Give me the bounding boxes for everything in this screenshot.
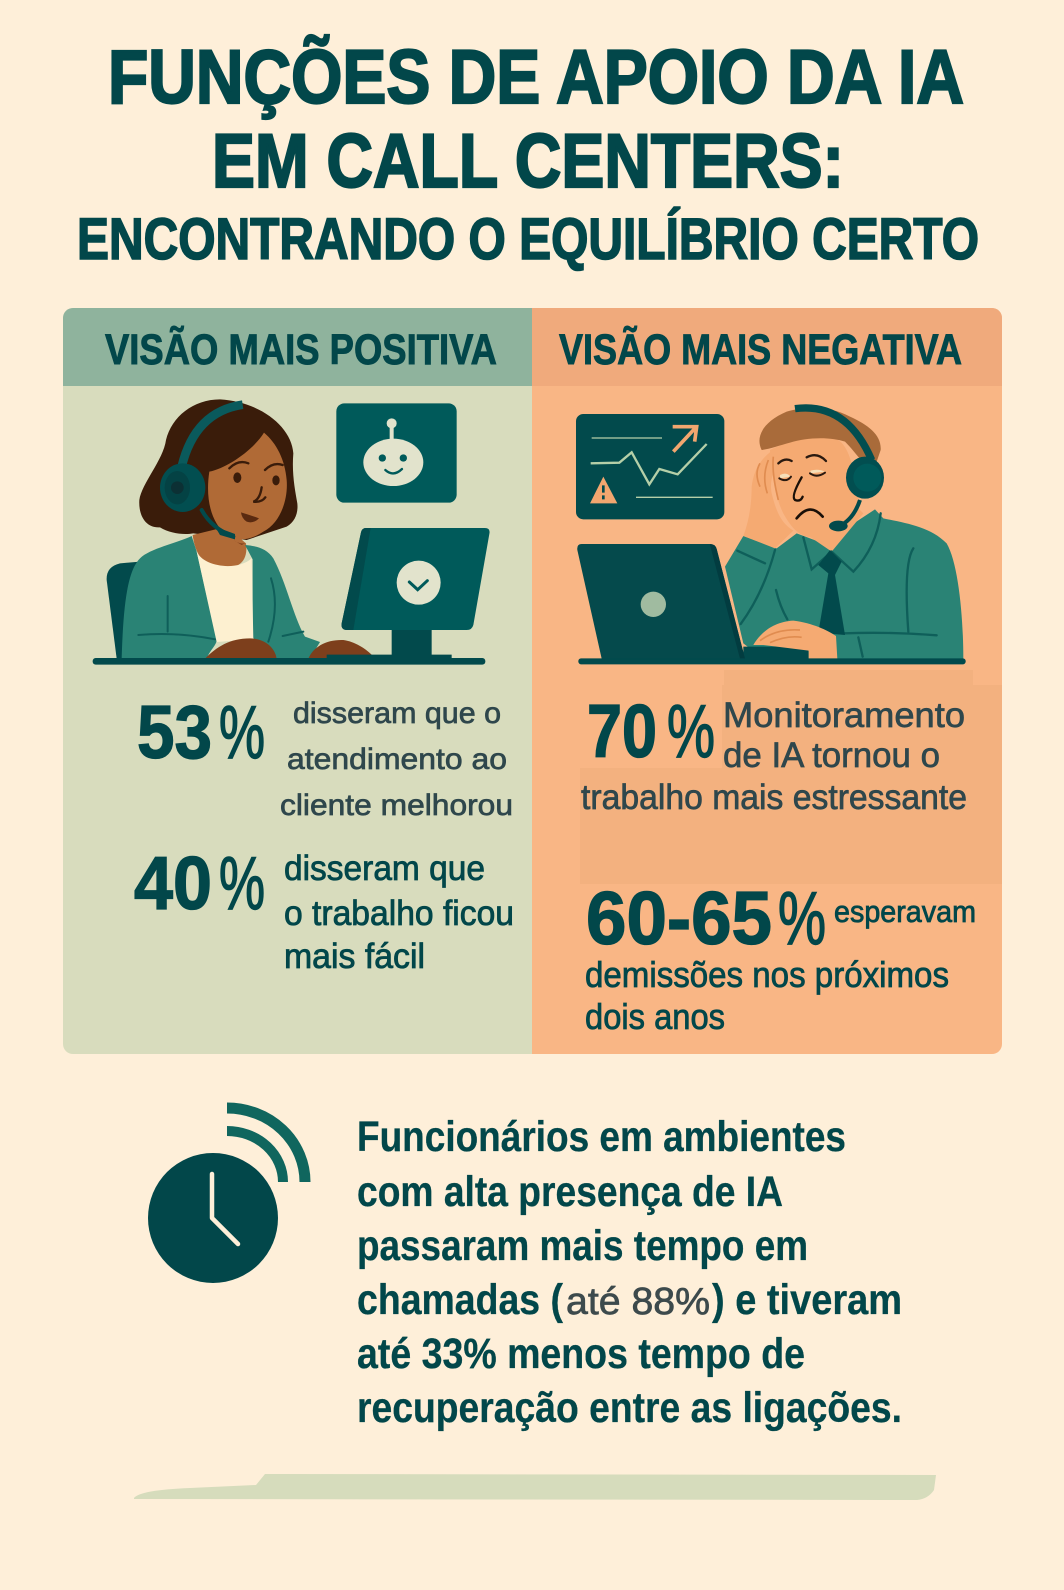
icon: robot — [336, 403, 457, 503]
footer bar — [134, 1474, 936, 1500]
stat: 70%: de IA tornou o — [723, 736, 940, 775]
collar and seams — [737, 513, 937, 657]
illustration: stressed agent with laptop and chart — [576, 408, 966, 664]
text block: summary: com alta presença de IA — [357, 1168, 783, 1216]
torso — [725, 509, 963, 659]
desk — [578, 658, 966, 664]
stat: 60-65%: esperavam — [834, 894, 976, 929]
stat: 40%: disseram que — [284, 849, 485, 888]
text block: summary: passaram mais tempo em — [357, 1222, 808, 1270]
hair — [139, 399, 298, 540]
icon: monitor with check — [327, 528, 490, 659]
stat: 60-65%: dois anos — [585, 996, 725, 1037]
stat: 60-65%: 60-65 — [586, 876, 772, 960]
jacket seams — [138, 578, 303, 642]
panel: visão mais negativa — [532, 308, 1002, 1054]
text block: summary: até 88% — [566, 1281, 710, 1323]
heading: visão mais negativa: VISÃO MAIS NEGATIVA — [559, 326, 962, 374]
text block: summary — [357, 1113, 902, 1432]
stat: 53%: cliente melhorou — [280, 789, 513, 822]
stat: 60-65%: demissões nos próximos — [585, 954, 949, 995]
icon: clock with signal arcs — [148, 1108, 305, 1283]
stat: 40% — [134, 841, 514, 976]
hands — [205, 638, 372, 659]
panel: visão mais positiva — [63, 308, 532, 1054]
text block: summary: até 33% menos tempo de — [357, 1330, 805, 1378]
stat: 53%: disseram que o — [293, 697, 501, 730]
stat: 40%: 40 — [134, 841, 212, 925]
headset — [795, 408, 884, 531]
desk — [93, 658, 485, 665]
stat: 53%: % — [219, 690, 265, 774]
face — [208, 433, 287, 539]
heading: visão mais positiva: VISÃO MAIS POSITIVA — [105, 326, 497, 374]
icon: laptop — [577, 544, 837, 659]
icon: warning chart — [576, 414, 724, 519]
hand on head — [743, 448, 793, 548]
stat: 53%: atendimento ao — [287, 743, 507, 776]
text block: summary: recuperação entre as ligações. — [357, 1384, 902, 1432]
stat: 60-65%: % — [778, 876, 826, 960]
stat: 60-65% — [585, 876, 976, 1037]
neck — [193, 527, 246, 568]
headset — [160, 405, 243, 539]
face details — [778, 455, 826, 518]
stat: 70%: 70 — [587, 689, 657, 773]
icon: chair — [107, 562, 140, 659]
title — [77, 35, 979, 272]
text block: summary: Funcionários em ambientes — [357, 1113, 846, 1161]
stat: 40%: % — [219, 841, 265, 925]
hair — [759, 408, 881, 463]
neck — [800, 500, 863, 552]
stat: 40%: mais fácil — [284, 937, 425, 976]
stat: 53% — [137, 690, 513, 822]
stat: 53%: 53 — [137, 690, 212, 774]
stat: 70% — [581, 689, 967, 817]
head — [770, 436, 858, 537]
text block: summary: chamadas ( — [357, 1276, 564, 1324]
stat: 70%: % — [667, 689, 715, 773]
stat: 40%: o trabalho ficou — [284, 894, 514, 933]
face details — [229, 462, 283, 545]
title: EM CALL CENTERS: — [212, 119, 844, 204]
stat: 70%: Monitoramento — [723, 696, 965, 735]
shirt — [197, 552, 253, 642]
jacket — [122, 536, 320, 659]
stat: 70%: trabalho mais estressante — [581, 778, 967, 817]
illustration: agent with headset, robot and monitor — [93, 399, 490, 665]
tie — [818, 550, 845, 635]
text block: summary: ) e tiveram — [712, 1276, 902, 1324]
